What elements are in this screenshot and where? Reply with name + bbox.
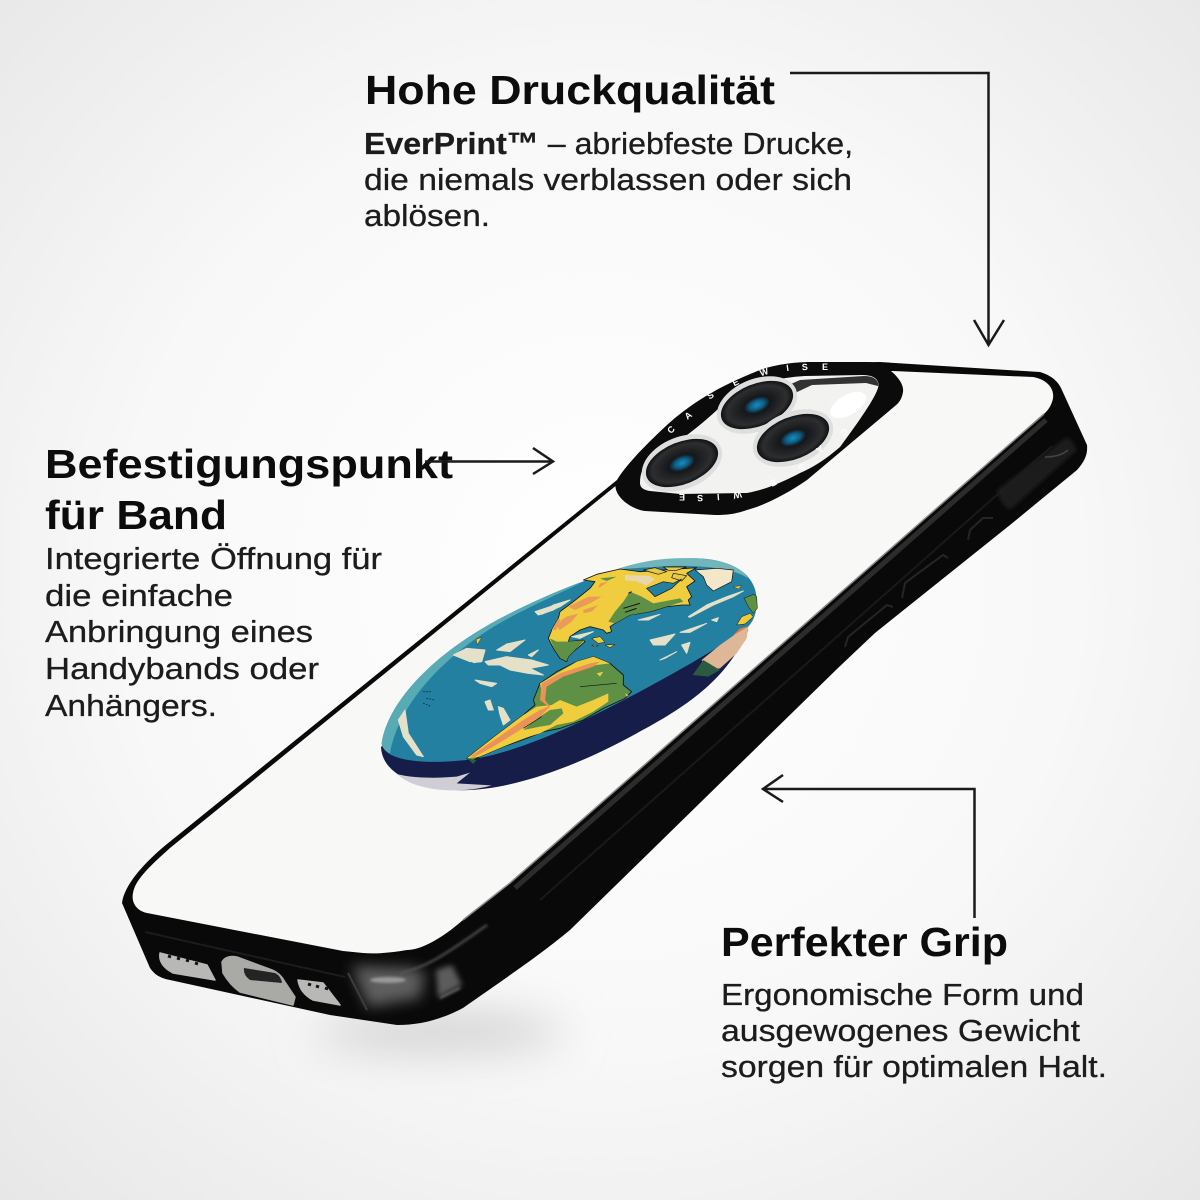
brand lettering: A [683, 409, 694, 422]
side grooves and buttons [145, 420, 1052, 1010]
river lines [523, 683, 617, 728]
left speaker [160, 953, 215, 980]
description [45, 541, 382, 723]
description: ausgewogenes Gewicht [721, 1013, 1080, 1048]
brand lettering [665, 362, 850, 503]
brand lettering: I [786, 363, 790, 373]
heading: Hohe Druckqualität [365, 67, 775, 113]
description: Anbringung eines [45, 614, 313, 649]
south yellow [467, 693, 608, 758]
arrow: strap attachment [425, 448, 553, 474]
icelandic island [733, 586, 742, 589]
lens right [744, 398, 842, 478]
north coast yellow [540, 657, 610, 700]
arrow: print quality [790, 73, 1004, 345]
globe [381, 558, 757, 790]
yellow spot [597, 672, 628, 697]
north africa tip [733, 626, 748, 635]
atlantic clouds [540, 591, 743, 660]
side crease [1045, 450, 1068, 457]
corner reflection edge [440, 988, 460, 998]
globe dark side [381, 630, 748, 790]
brand lettering: S [697, 493, 703, 503]
south inner green [523, 708, 563, 730]
pacific atolls [423, 692, 435, 707]
green alaska [600, 577, 617, 581]
corner ridge [400, 925, 487, 973]
north america [548, 568, 697, 662]
heading: für Band [45, 492, 227, 538]
phone shadow [315, 1012, 565, 1052]
small island [476, 637, 482, 645]
corner bright spot [370, 977, 406, 983]
callout: strap attachment [45, 441, 453, 723]
africa forest [693, 660, 720, 677]
case body [122, 362, 1087, 1025]
charging port [222, 957, 295, 1005]
description: Handybands oder [45, 651, 319, 686]
lens top [708, 365, 806, 445]
description: die einfache [45, 578, 233, 613]
camera module [615, 362, 903, 515]
great lakes [623, 592, 640, 612]
south america region [467, 650, 632, 764]
orange uplands [552, 582, 608, 630]
description: ablösen. [364, 198, 490, 233]
description [721, 977, 1107, 1084]
arctic islands [643, 567, 687, 581]
brand lettering: E [768, 477, 778, 489]
hudson bay [647, 579, 682, 597]
continent [467, 657, 632, 762]
description: Integrierte Öffnung für [45, 541, 382, 576]
brand lettering: W [759, 366, 770, 378]
brand lettering: I [717, 492, 720, 502]
camera bump [615, 362, 903, 515]
inner edge sheen [463, 414, 1044, 920]
brand lettering: E [822, 362, 828, 372]
callout: perfect grip [721, 919, 1107, 1084]
description: die niemals verblassen oder sich [364, 162, 852, 197]
caribbean islands [592, 637, 615, 648]
pacific clouds [398, 600, 570, 757]
greenland [695, 568, 733, 591]
heading: Befestigungspunkt [45, 441, 453, 487]
north atlantic region [540, 567, 757, 677]
brand lettering: E [731, 376, 741, 388]
corner highlight [352, 966, 425, 1007]
description [364, 126, 853, 233]
brand lettering: A [814, 443, 825, 456]
flash [826, 386, 870, 424]
camera opening [640, 375, 878, 494]
brand lettering: S [705, 390, 716, 401]
pacific clouds south [467, 650, 548, 725]
phone case [122, 362, 1087, 1025]
andes [470, 662, 600, 757]
brand lettering: C [838, 426, 850, 439]
iberia [737, 613, 753, 625]
opening inner shadow [782, 376, 878, 393]
ocean rim [382, 582, 583, 753]
europe [744, 594, 757, 613]
globe base [381, 558, 757, 790]
brand lettering: E [679, 492, 685, 502]
white back panel [133, 371, 1053, 953]
ocean rim north [617, 558, 748, 578]
description: Ergonomische Form und [721, 977, 1084, 1012]
brand lettering: S [801, 362, 808, 372]
description: EverPrint™ – abriebfeste Drucke, [364, 126, 853, 161]
lens left [633, 423, 731, 503]
ocean [382, 558, 757, 762]
side switch [997, 437, 1077, 510]
right speaker [298, 980, 340, 1005]
arrow: perfect grip [763, 775, 974, 918]
africa desert [702, 627, 748, 670]
description: sorgen für optimalen Halt. [721, 1049, 1107, 1084]
heading: Perfekter Grip [721, 919, 1008, 965]
antarctica [397, 773, 492, 790]
corner reflection block [436, 965, 462, 998]
southern tip [467, 758, 477, 764]
heading [45, 441, 453, 538]
brand lettering: W [732, 489, 743, 501]
callout: print quality [364, 67, 853, 233]
brand lettering: C [665, 424, 677, 436]
central america [550, 638, 584, 661]
canadian arctic [625, 575, 655, 586]
description: Anhängers. [45, 688, 217, 723]
brand lettering: S [796, 462, 807, 473]
green interior [608, 592, 683, 623]
